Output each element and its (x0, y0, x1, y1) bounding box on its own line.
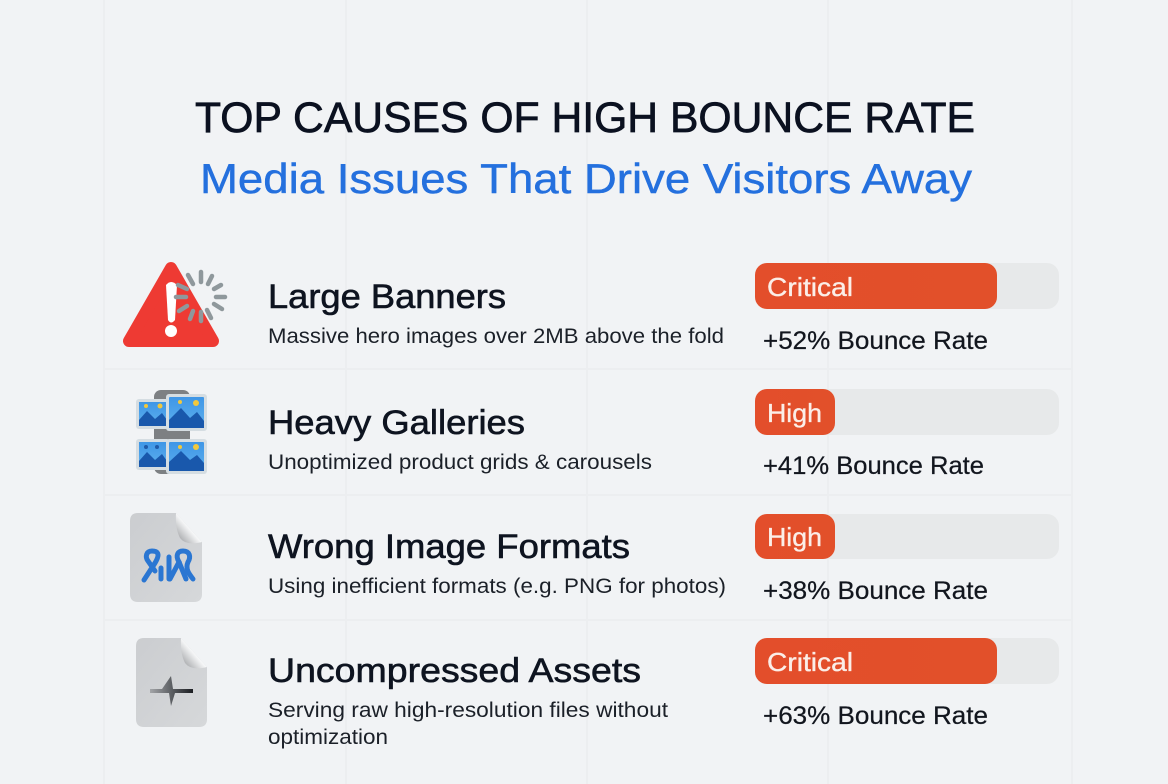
heading: Wrong Image Formats (268, 528, 630, 566)
row: uncompressed assets (136, 638, 1059, 749)
bounce rate: +38% Bounce Rate (763, 577, 988, 605)
severity bar: high: High (767, 398, 822, 428)
severity bar: high: High (767, 522, 822, 552)
bounce rate: +52% Bounce Rate (763, 327, 988, 355)
bounce rate: +41% Bounce Rate (763, 452, 984, 480)
subtitle: Media Issues That Drive Visitors Away (200, 155, 972, 202)
severity bar: critical: Critical (767, 272, 853, 302)
heading: Heavy Galleries (268, 404, 525, 442)
icon: warning triangle with spinner (129, 268, 225, 341)
heading: Uncompressed Assets (268, 652, 641, 690)
row: heavy galleries (136, 389, 1059, 480)
severity bar: critical: Critical (767, 647, 853, 677)
description: Massive hero images over 2MB above the fold (268, 325, 724, 348)
severity bar: critical (755, 638, 1059, 684)
severity bar: high (755, 389, 1059, 435)
row: wrong image formats (130, 513, 1059, 605)
title: TOP CAUSES OF HIGH BOUNCE RATE (195, 94, 975, 142)
description: Using inefficient formats (e.g. PNG for photos) (268, 575, 726, 598)
description: Unoptimized product grids & carousels (268, 451, 652, 474)
icon: file with blue glyph (130, 513, 202, 602)
icon: image gallery (136, 390, 207, 474)
row: uncompressed assets: optimization (268, 726, 388, 749)
bounce rate: +63% Bounce Rate (763, 702, 988, 730)
description: Serving raw high-resolution files without (268, 699, 668, 722)
severity bar: high (755, 514, 1059, 559)
row: large banners (129, 263, 1059, 355)
severity bar: critical (755, 263, 1059, 309)
heading: Large Banners (268, 278, 506, 316)
icon: file with pulse glyph (136, 638, 207, 727)
